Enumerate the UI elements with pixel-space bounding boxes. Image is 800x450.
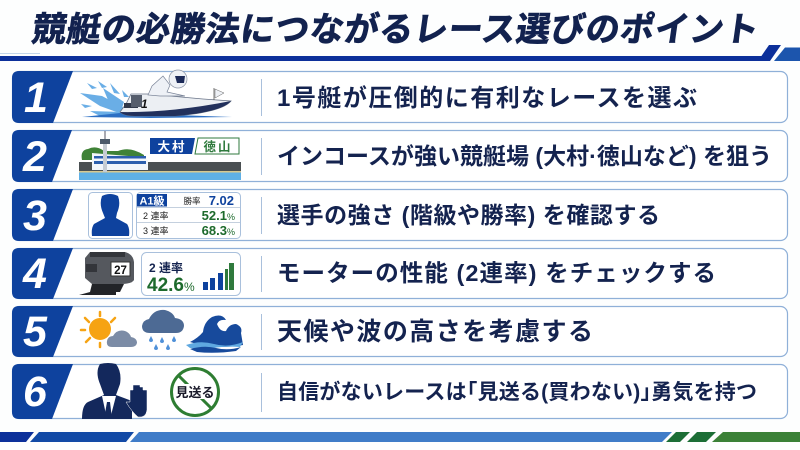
row 1 [12,70,788,123]
title: 競艇の必勝法につながるレース選びのポイント [30,10,761,49]
sign: 徳山: 徳山 [203,139,233,154]
icon: rain cloud [142,310,184,350]
row 3 number: 3 [23,192,47,240]
row 6 badge [12,364,73,419]
icon: racer silhouette [88,192,132,238]
bar chart [203,263,234,290]
illustration: racecourse [79,131,241,180]
row 5 number: 5 [23,308,48,356]
stats table: A1級 [139,194,165,208]
row 4 [12,248,788,299]
sign: 徳山 [195,138,239,154]
row 4 card [12,248,788,298]
row 2 badge [12,130,72,182]
stat card: 2連率: 42.6% [147,275,195,296]
icon: outboard motor: 27 [114,265,127,277]
sign: 大村: 大村 [157,139,187,154]
icon: racing boat: 1 [141,97,148,111]
icon: 見送る prohibition sign [172,368,218,416]
row 4 badge [12,248,73,299]
row 6 number: 6 [23,368,48,416]
row 1 badge [12,71,73,123]
row 5 card [12,306,788,356]
row 3 badge [12,189,73,241]
icon: outboard motor [79,252,134,295]
row 1 text: 1号艇が圧倒的に有利なレースを選ぶ [277,84,697,112]
row 3 [12,189,788,241]
stat card: 2連率: 2 連率 [149,260,183,275]
row 5 badge [12,306,73,357]
row 5 [12,306,788,357]
sign: 大村 [150,138,195,154]
row 6 card [12,364,788,418]
icon: waves [186,316,243,353]
row 4 text: モーターの性能 (2連率) をチェックする [277,260,716,286]
icon: businessman stop gesture [82,363,147,419]
row 6 text: 自信がないレースは｢見送る(買わない)｣勇気を持つ [277,380,757,404]
stats table: 52.1% [202,208,235,223]
stats table: 68.3% [202,223,235,238]
row 1 card [12,72,788,122]
row 6 [12,363,788,419]
stats table [136,192,240,238]
icon: 見送る prohibition sign: 見送る [175,385,215,400]
row 2 text: インコースが強い競艇場 (大村·徳山など) を狙う [277,143,772,169]
footer stripe [0,432,800,442]
stats table: 勝率 [183,196,201,206]
stats table: 3 連率 [143,225,169,236]
icon: racing boat [80,70,232,118]
stat card: 2連率 [142,252,240,296]
stats table: 7.02 [209,193,234,208]
row 1 number: 1 [24,74,48,122]
row 2 card [12,130,788,182]
stats table: 2 連率 [143,210,169,221]
icon: sun and cloud [81,312,137,347]
row 3 text: 選手の強さ (階級や勝率) を確認する [277,202,660,228]
row 2 [12,130,788,182]
row 5 text: 天候や波の高さを考慮する [277,318,593,346]
row 2 number: 2 [22,133,47,181]
row 4 number: 4 [22,250,47,298]
header rule [0,45,800,61]
row 3 card [12,190,788,240]
